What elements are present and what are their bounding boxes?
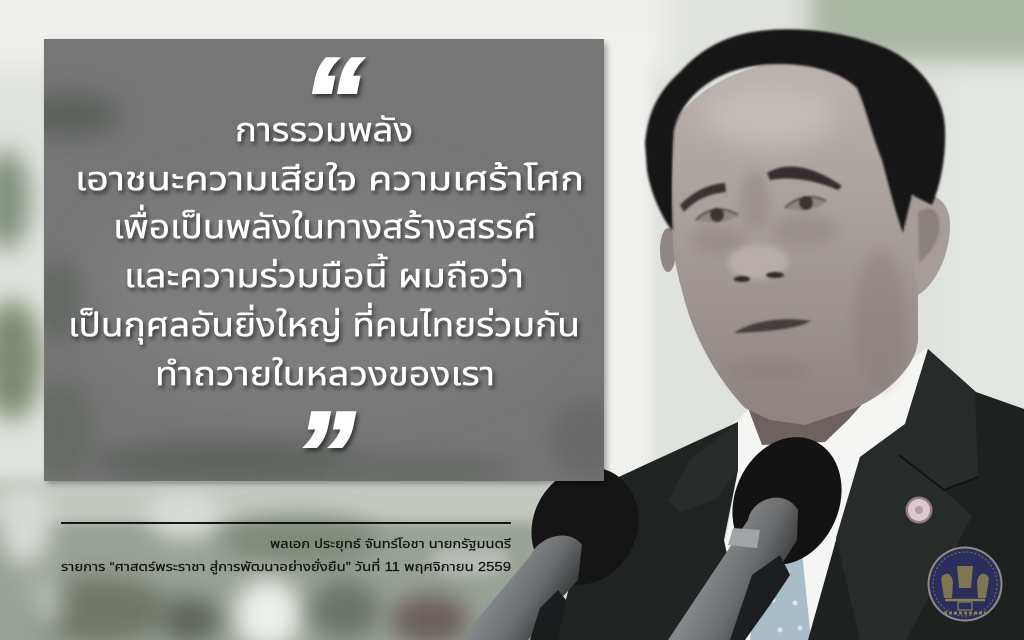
speaker name: พลเอก ประยุทธ์ จันทร์โอชา นายกรัฐมนตรี [270,537,511,551]
forehead highlight [706,85,834,145]
clip [530,590,566,640]
icon: government seal [928,546,1002,622]
face [673,62,918,425]
quote text: การรวมพลัง [235,111,413,148]
suit jacket right [808,349,1024,640]
lapel pin [906,496,932,524]
mouth [734,319,811,333]
left ear [660,228,676,272]
right eyebrow [767,166,842,190]
nose [728,245,788,282]
person: prime minister portrait [460,29,1024,640]
handle [668,498,798,640]
quote text: เพื่อเป็นพลังในทางสร้างสรรค์ [113,204,536,245]
microphone 1 [460,450,657,640]
tie [750,552,811,640]
handle [460,535,582,640]
left eyebrow [680,183,726,212]
quote text: และความร่วมมือนี้ ผมถือว่า [124,253,524,294]
facial shading [692,170,906,390]
clip [730,555,790,640]
attribution [61,537,511,574]
quote text: เอาชนะความเสียใจ ความเศร้าโศก [75,160,584,197]
shirt [722,348,932,640]
left eye [696,208,738,223]
quote panel [44,39,604,481]
quote text [68,111,584,392]
band [728,528,760,548]
right eye [785,196,826,210]
panel shadow [47,43,607,484]
programme and date: รายการ “ศาสตร์พระราชา สู่การพัฒนาอย่างยั่งยืน” วันที่ 11 พฤศจิกายน 2559 [61,558,511,574]
decorative closing quote mark: ” [295,388,355,522]
quote text: ทำถวายในหลวงของเรา [155,355,495,392]
decorative opening quote mark: “ [303,33,363,167]
right ear [905,194,950,295]
microphone 2 [668,420,861,640]
quote text: เป็นกุศลอันยิ่งใหญ่ ที่คนไทยร่วมกัน [68,302,580,345]
hair [645,29,945,233]
neck [745,390,875,445]
foam head [713,420,861,582]
left lapel [668,422,738,512]
suit jacket left [555,422,745,640]
right lapel [836,349,978,640]
foam head [513,450,657,602]
